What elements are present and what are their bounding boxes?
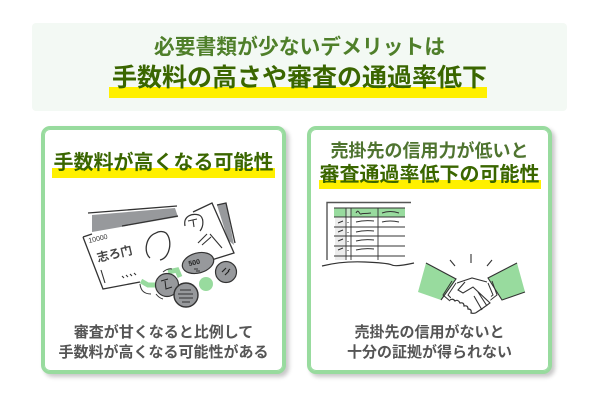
heading: main title: 手数料の高さや審査の通過率低下 (112, 64, 487, 92)
highlight: title marker (109, 87, 487, 98)
heading: subtitle: 必要書類が少ないデメリットは (154, 36, 445, 59)
text: right description (347, 324, 512, 361)
text: right description: 売掛先の信用がないと (354, 324, 504, 341)
icon: banknotes and coins: 志ろ门 (95, 242, 134, 265)
heading: right line 2: 審査通過率低下の可能性 (320, 164, 540, 186)
icon: banknotes and coins: 10000 (88, 234, 109, 245)
panel: higher fees (41, 126, 286, 374)
heading: right line 1: 売掛先の信用力が低いと (330, 141, 528, 161)
text: left description (58, 324, 268, 361)
panel: lower approval (307, 126, 552, 374)
text: left description: 審査が甘くなると比例して (74, 324, 253, 341)
text: right description: 十分の証拠が得られない (347, 344, 512, 361)
icon: banknotes and coins: 500 (188, 259, 201, 268)
highlight: right heading marker (319, 180, 541, 189)
text: left description: 手数料が高くなる可能性がある (58, 344, 268, 361)
heading: higher fees: 手数料が高くなる可能性 (54, 152, 274, 174)
panel: header (32, 23, 567, 111)
highlight: left heading marker (52, 168, 275, 178)
